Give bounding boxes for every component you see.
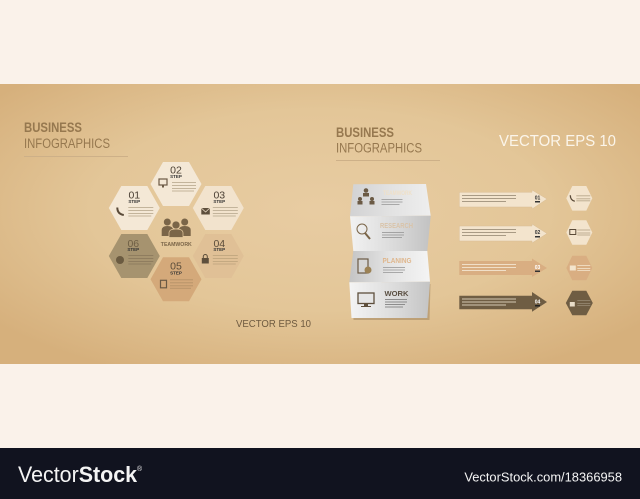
- hex step 02: [150, 162, 202, 206]
- tan main panel: [0, 84, 640, 364]
- folded paper panel: [349, 184, 431, 320]
- fold planing: PLANING: [382, 258, 412, 265]
- arrow 03: 03: [535, 265, 540, 271]
- small hex 4: [566, 291, 593, 315]
- hex step 05: STEP: [170, 270, 182, 275]
- arrow 04: 04: [535, 300, 540, 306]
- arrow 01: [459, 190, 547, 209]
- footer logo: VectorStock: [18, 462, 140, 487]
- arrow 01: 01: [535, 196, 540, 202]
- fold teamwork: TEAMWORK: [383, 190, 412, 197]
- vector eps caption lower: VECTOR EPS 10: [236, 319, 311, 330]
- arrow 02: 02: [535, 230, 540, 236]
- hex step 02: STEP: [170, 174, 182, 179]
- hex step 01: [109, 186, 160, 230]
- right heading: BUSINESS: [336, 125, 394, 140]
- hex step 04: 04: [213, 238, 225, 250]
- arrow 04: [459, 292, 547, 312]
- hex step 05: 05: [170, 260, 182, 272]
- top band: [0, 0, 640, 84]
- footer logo: ®: [137, 465, 143, 473]
- vector eps caption upper: VECTOR EPS 10: [499, 133, 616, 150]
- fold research: RESEARCH: [380, 221, 413, 230]
- footer url: VectorStock.com/18366958: [464, 470, 622, 484]
- small hex 2: [566, 220, 592, 245]
- small hex 1: [566, 186, 592, 211]
- teamwork label: TEAMWORK: [161, 242, 193, 248]
- teamwork center icon: [162, 218, 191, 238]
- hex step 04: [193, 234, 244, 278]
- hex step 01: 01: [128, 190, 140, 202]
- left heading: [24, 120, 128, 157]
- hex step 06: [109, 234, 160, 278]
- hex step 06: STEP: [127, 247, 139, 252]
- arrow 02: [459, 224, 547, 243]
- hexagon diagram: [109, 162, 244, 301]
- fold work: WORK: [384, 289, 409, 298]
- small hex 3: [566, 256, 592, 280]
- right heading: INFOGRAPHICS: [336, 141, 422, 156]
- hex step 06: 06: [127, 238, 139, 250]
- right heading: [336, 125, 440, 161]
- left heading: INFOGRAPHICS: [24, 136, 110, 151]
- footer bar: [0, 448, 640, 499]
- hex step 02: 02: [170, 164, 182, 176]
- arrow 03: [459, 258, 547, 277]
- hex step 04: STEP: [213, 247, 225, 252]
- hex step 03: STEP: [213, 199, 225, 204]
- left heading: BUSINESS: [24, 120, 82, 135]
- hex step 01: STEP: [128, 199, 140, 204]
- hex step 03: 03: [213, 190, 225, 202]
- lower band: [0, 364, 640, 448]
- hex step 05: [150, 257, 202, 301]
- fold shadow: [352, 284, 430, 320]
- hex step 03: [193, 186, 244, 230]
